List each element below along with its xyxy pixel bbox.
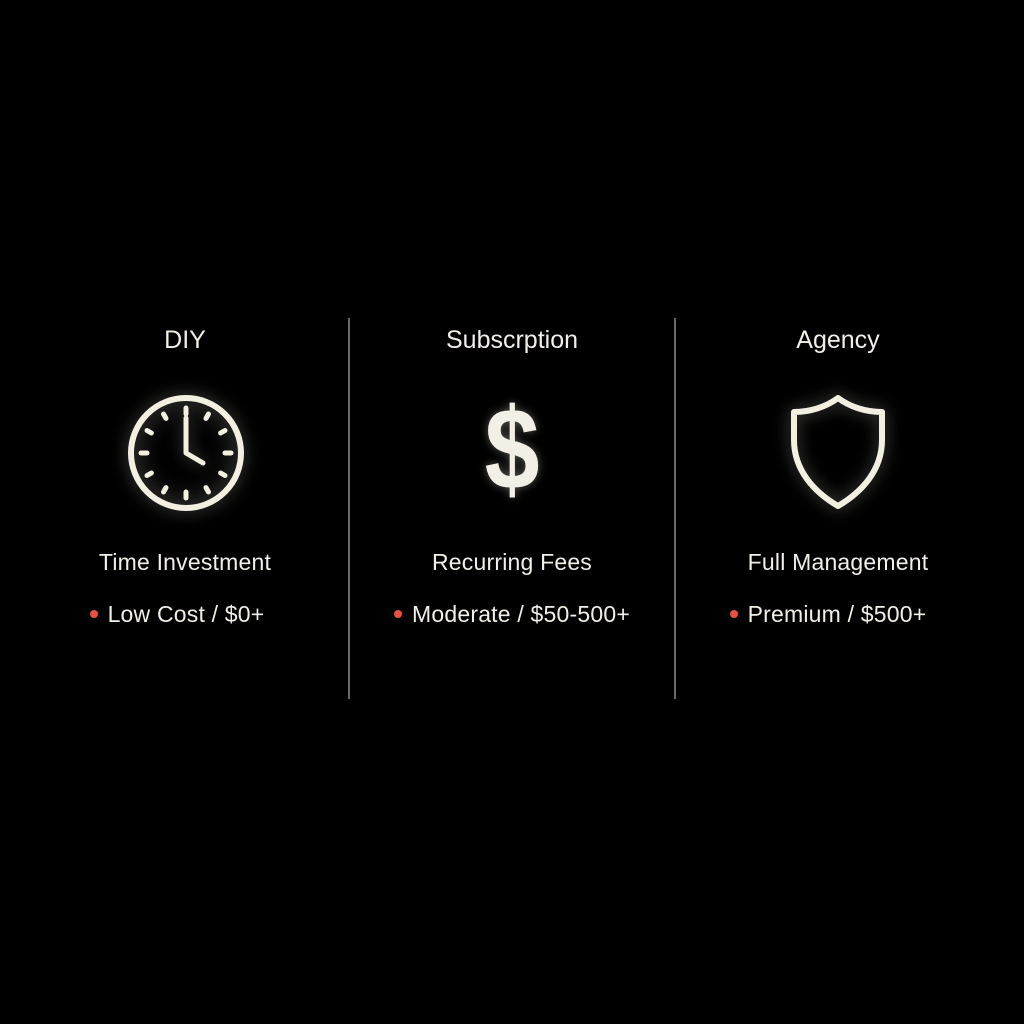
bullet: Moderate: Moderate / $50-500+: [412, 601, 630, 627]
heading: DIY: DIY: [164, 326, 206, 354]
bullet: Premium: Premium / $500+: [748, 601, 926, 627]
subtitle: Time Investment: Time Investment: [99, 549, 271, 575]
heading: Agency: Agency: [796, 326, 880, 354]
icon: clock: [119, 386, 253, 520]
icon: shield: [782, 388, 894, 516]
icon: dollar: $: [485, 384, 539, 514]
subtitle: Recurring Fees: Recurring Fees: [432, 549, 592, 575]
subtitle: Full Management: Full Management: [748, 549, 928, 575]
heading: Subscription: Subscrption: [446, 326, 578, 354]
bullet: Low Cost: Low Cost / $0+: [108, 601, 264, 627]
